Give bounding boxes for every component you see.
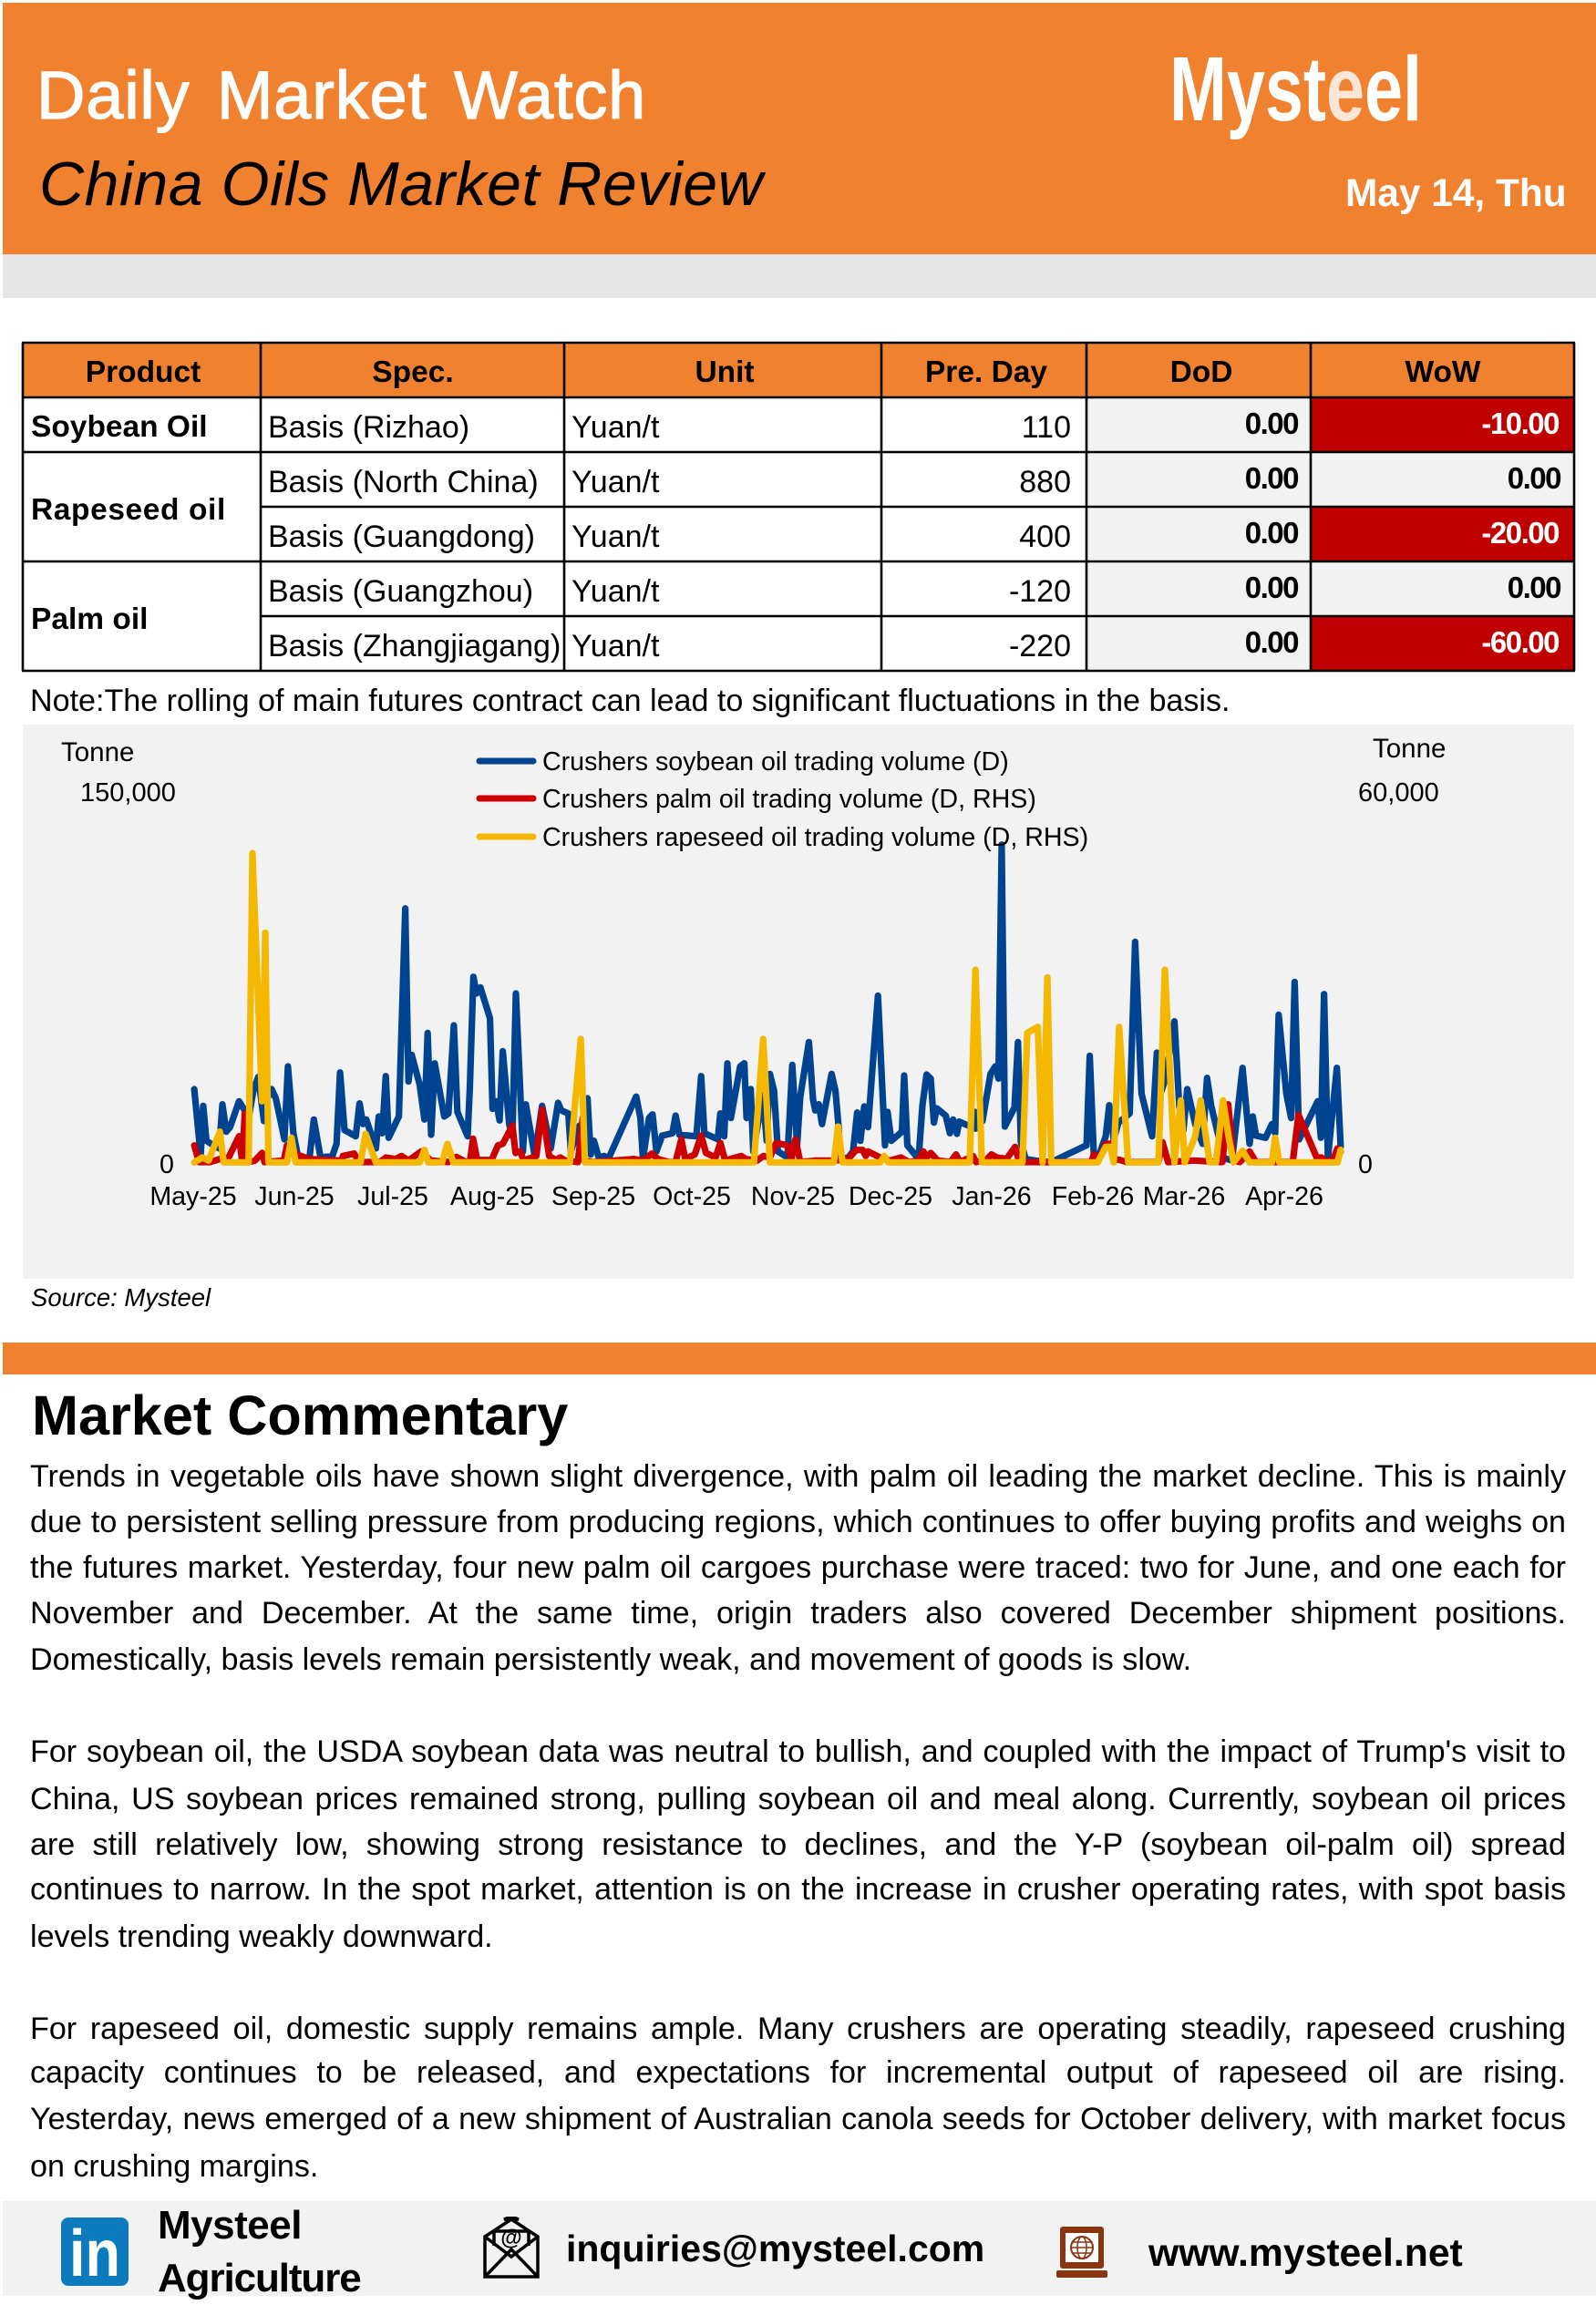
x axis month labels: Feb-26 <box>1052 1182 1134 1211</box>
WoW column cells <box>1311 397 1574 671</box>
email address: inquiries@mysteel.com <box>566 2228 984 2269</box>
DoD values: 0.00 <box>1245 516 1298 550</box>
commentary paragraph 2: are still relatively low, showing strong resistance to declines, and the Y-P (soybean oil-palm oil) spread <box>30 1827 1566 1862</box>
left axis labels <box>61 737 176 1179</box>
x axis month labels: Aug-25 <box>450 1182 534 1211</box>
commentary paragraph 2 <box>30 1734 1566 1954</box>
source note: Source: Mysteel <box>31 1283 211 1312</box>
table note: Note:The rolling of main futures contract can lead to significant fluctuations in the basis. <box>30 684 1230 718</box>
left axis labels: Tonne <box>61 737 134 767</box>
DoD values: 0.00 <box>1245 461 1298 495</box>
table grid lines <box>22 341 1575 673</box>
left axis labels: 0 <box>160 1150 174 1179</box>
DoD values <box>1245 406 1298 659</box>
linkedin label: Mysteel <box>158 2203 302 2248</box>
x axis month labels: May-25 <box>149 1182 237 1211</box>
spec column: Basis (North China) <box>268 465 539 499</box>
chart legend: Crushers palm oil trading volume (D, RHS) <box>542 785 1036 814</box>
DoD values: 0.00 <box>1245 571 1298 604</box>
commentary paragraph 3: capacity continues to be released, and expectations for incremental output of rapeseed oil are rising. <box>30 2055 1566 2090</box>
unit column <box>571 410 660 664</box>
chart legend <box>479 747 1088 852</box>
commentary paragraph 1: due to persistent selling pressure from producing regions, which continues to offer buying profits and weighs on <box>30 1505 1566 1539</box>
x axis month labels: Jul-25 <box>357 1182 428 1211</box>
left axis labels: 150,000 <box>80 778 176 808</box>
WoW values <box>1481 406 1560 659</box>
DoD values: 0.00 <box>1245 406 1298 440</box>
row: Soybean Oil: Soybean Oil <box>31 410 208 444</box>
commentary paragraph 3: For rapeseed oil, domestic supply remains ample. Many crushers are operating steadily, rapeseed crushing <box>30 2012 1566 2046</box>
date: May 14, Thu <box>1345 171 1567 214</box>
table header row: Product <box>86 355 201 389</box>
commentary paragraph 2: continues to narrow. In the spot market, attention is on the increase in crusher operating rates, with spot basis <box>30 1872 1566 1907</box>
icon: email envelope: @ <box>500 2226 522 2250</box>
WoW values: -60.00 <box>1481 625 1559 659</box>
right axis labels <box>1358 734 1446 1179</box>
previous day values: 880 <box>1019 465 1071 499</box>
x axis month labels: Dec-25 <box>849 1182 932 1211</box>
x axis month labels: Sep-25 <box>551 1182 635 1211</box>
spec column <box>268 410 561 664</box>
DoD column shading <box>1086 397 1311 671</box>
linkedin label <box>158 2203 361 2300</box>
table header row: WoW <box>1405 355 1481 389</box>
row: Palm oil: Palm oil <box>31 602 148 636</box>
commentary paragraph 1: Domestically, basis levels remain persistently weak, and movement of goods is slow. <box>30 1642 1191 1677</box>
WoW values: -20.00 <box>1481 516 1559 550</box>
chart legend: Crushers soybean oil trading volume (D) <box>542 747 1009 777</box>
table: basis prices <box>22 341 1575 673</box>
spec column: Basis (Guangdong) <box>268 520 535 554</box>
x axis month labels: Mar-26 <box>1143 1182 1225 1211</box>
commentary paragraph 3: Yesterday, news emerged of a new shipment of Australian canola seeds for October delivery, with market focus <box>30 2102 1566 2136</box>
previous day values <box>1009 410 1071 664</box>
unit column: Yuan/t <box>571 410 659 445</box>
previous day values: -220 <box>1009 629 1071 664</box>
table header row: Unit <box>695 355 755 389</box>
grey band <box>3 254 1596 298</box>
x axis month labels: Jan-26 <box>952 1182 1032 1211</box>
commentary paragraph 1: November and December. At the same time, origin traders also covered December shipment positions. <box>30 1596 1566 1631</box>
heading: Market Commentary: Market Commentary <box>32 1384 568 1446</box>
commentary paragraph 1: the futures market. Yesterday, four new palm oil cargoes purchase were traced: two for June, and one each for <box>30 1550 1566 1585</box>
red line: palm oil volume <box>194 1105 1341 1162</box>
panel: trading volume chart <box>23 725 1574 1279</box>
commentary paragraph 1: Trends in vegetable oils have shown slight divergence, with palm oil leading the market decline. This is mainly <box>30 1459 1566 1494</box>
spec column: Basis (Guangzhou) <box>268 574 533 609</box>
right axis labels: Tonne <box>1373 734 1446 764</box>
commentary paragraph 1 <box>30 1459 1566 1677</box>
linkedin label: Agriculture <box>158 2256 361 2300</box>
x axis month labels: Oct-25 <box>653 1182 731 1211</box>
x axis month labels: Apr-26 <box>1245 1182 1323 1211</box>
orange divider band <box>3 1343 1596 1374</box>
WoW values: 0.00 <box>1508 571 1560 604</box>
commentary paragraph 2: levels trending weakly downward. <box>30 1919 493 1954</box>
spec column: Basis (Zhangjiagang) <box>268 629 561 664</box>
row: Rapeseed oil: Rapeseed oil <box>31 493 226 527</box>
spec column: Basis (Rizhao) <box>268 410 469 445</box>
icon: website device <box>1056 2227 1107 2278</box>
table header row: DoD <box>1170 355 1232 389</box>
unit column: Yuan/t <box>571 629 659 664</box>
table header row: Pre. Day <box>925 355 1047 389</box>
right axis labels: 0 <box>1358 1150 1373 1179</box>
icon: email envelope <box>483 2217 540 2279</box>
table header row: Spec. <box>372 355 454 389</box>
previous day values: 400 <box>1019 520 1071 554</box>
WoW values: -10.00 <box>1481 406 1559 440</box>
unit column: Yuan/t <box>571 465 659 499</box>
commentary paragraph 2: China, US soybean prices remained strong, pulling soybean oil and meal along. Currently, soybean oil prices <box>30 1782 1566 1816</box>
commentary paragraph 2: For soybean oil, the USDA soybean data was neutral to bullish, and coupled with the impact of Trump's visit to <box>30 1734 1566 1769</box>
footer bar <box>3 2201 1596 2296</box>
previous day values: 110 <box>1022 410 1071 445</box>
website address: www.mysteel.net <box>1148 2231 1463 2275</box>
WoW values: 0.00 <box>1508 461 1560 495</box>
subtitle: China Oils Market Review: China Oils Market Review <box>39 149 763 219</box>
table header row <box>23 343 1574 397</box>
commentary paragraph 3: on crushing margins. <box>30 2149 318 2184</box>
DoD values: 0.00 <box>1245 625 1298 659</box>
commentary paragraph 3 <box>30 2012 1566 2184</box>
blue line: soybean oil volume <box>194 845 1341 1162</box>
unit column: Yuan/t <box>571 574 659 609</box>
yellow line: rapeseed oil volume <box>194 853 1341 1162</box>
header banner <box>3 3 1596 254</box>
right axis labels: 60,000 <box>1358 778 1439 808</box>
previous day values: -120 <box>1009 574 1071 609</box>
x axis month labels: Nov-25 <box>751 1182 835 1211</box>
x axis month labels: Jun-25 <box>254 1182 335 1211</box>
chart legend: Crushers rapeseed oil trading volume (D, RHS) <box>542 823 1088 852</box>
x axis month labels <box>149 1182 1323 1211</box>
title: Daily Market Watch: Daily Market Watch <box>36 57 646 133</box>
unit column: Yuan/t <box>571 520 659 554</box>
